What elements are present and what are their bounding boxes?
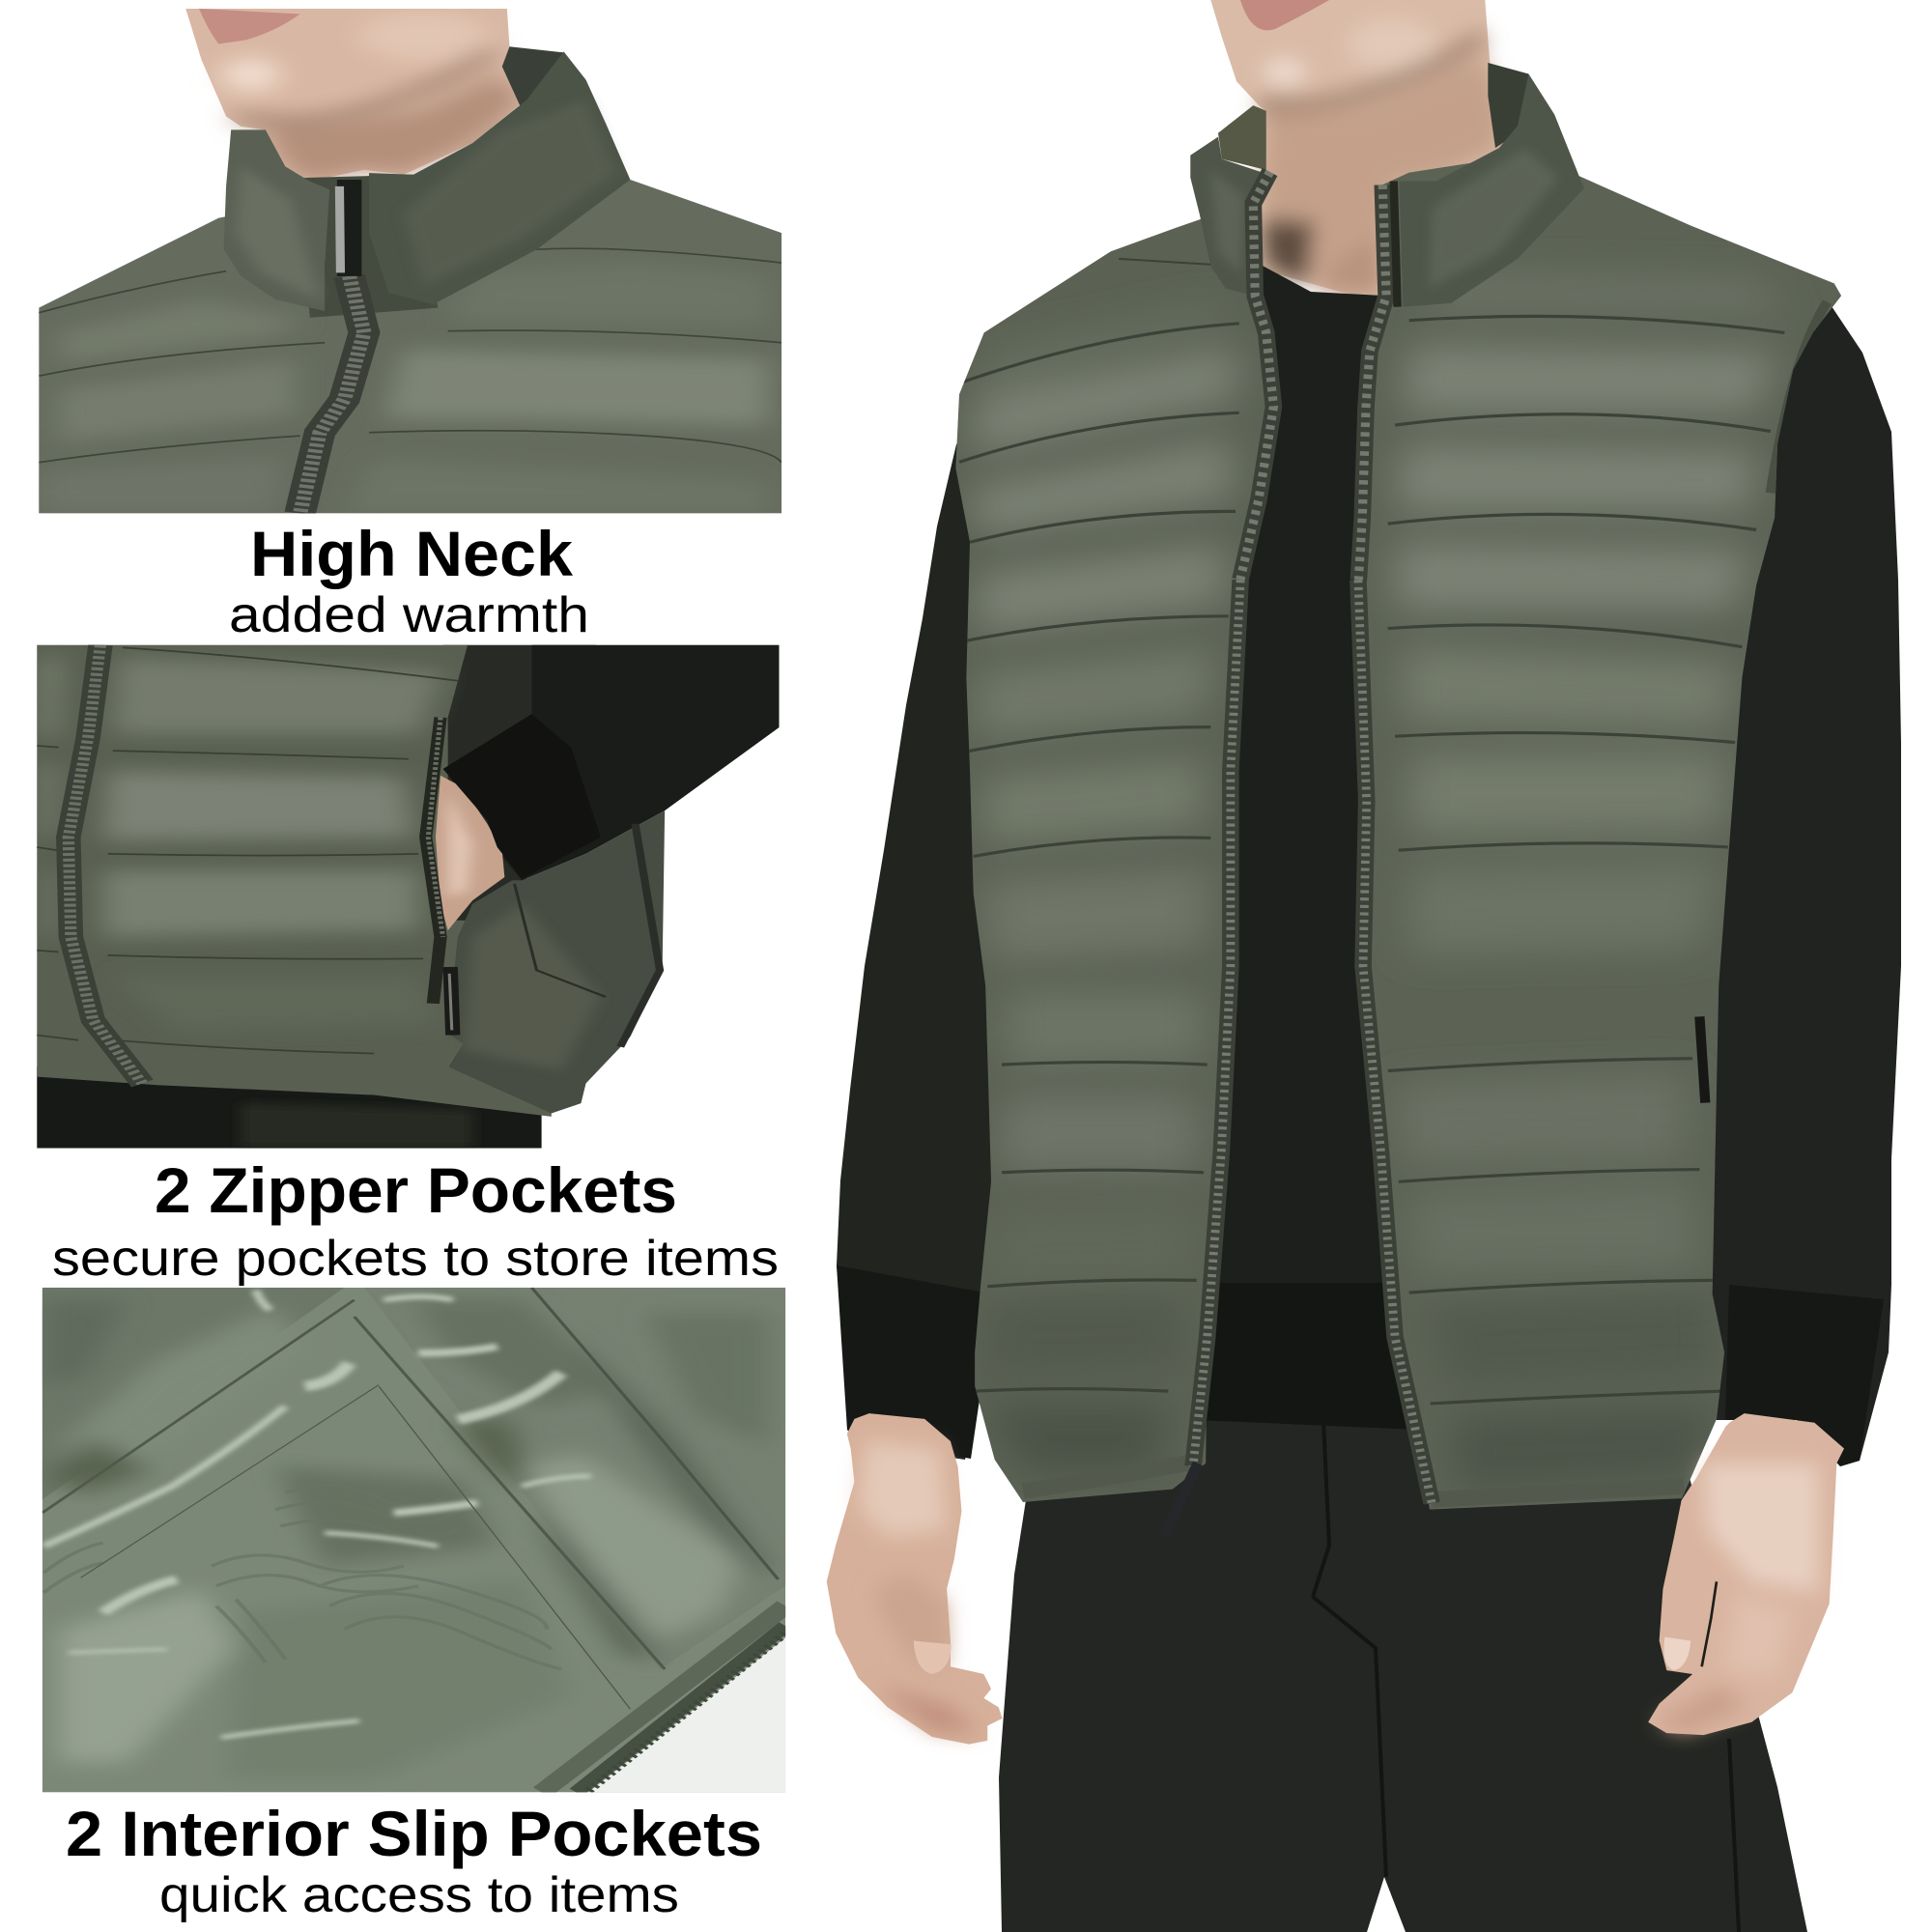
- heading: High Neck: added warmth: [229, 587, 589, 643]
- dark side panel: [442, 645, 596, 921]
- white background wedge: [588, 1637, 785, 1792]
- vest left front: [949, 166, 1282, 1510]
- face and neck: [1210, 0, 1518, 303]
- lips: [199, 9, 300, 43]
- quilting seams: [37, 647, 458, 1053]
- trousers: [37, 1066, 542, 1149]
- moire ripples: [43, 1486, 561, 1669]
- heading: High Neck: High Neck: [250, 518, 573, 589]
- lower side panel: [448, 810, 665, 1113]
- pocket zipper: [426, 718, 453, 1036]
- left sleeve: [837, 386, 1024, 1460]
- vest hem binding: [1023, 1462, 1684, 1499]
- sleeve cuffs: [837, 1265, 995, 1459]
- heading: 2 Zipper Pockets: [52, 1154, 779, 1287]
- quilted panel right: [364, 1288, 785, 1669]
- satin highlights: [43, 1290, 591, 1738]
- sweater rib hem: [1198, 1283, 1420, 1430]
- lips: [1240, 0, 1329, 30]
- heading: High Neck: [229, 518, 589, 643]
- front zipper: [69, 645, 142, 1083]
- lit vest front: [37, 645, 552, 1117]
- neck-side zippers: [1240, 172, 1398, 580]
- zipper placket: [298, 175, 438, 318]
- heading: 2 Interior Slip Pockets: 2 Interior Slip Pockets: [66, 1798, 762, 1869]
- zipper: [300, 180, 364, 513]
- zipper pull: [1164, 1463, 1198, 1536]
- vest right front: [1352, 148, 1848, 1516]
- face and neck skin: [185, 9, 522, 182]
- pocket seams: [43, 1288, 779, 1709]
- trousers: [999, 1391, 1807, 1932]
- heading: 2 Interior Slip Pockets: quick access to items: [159, 1867, 679, 1923]
- vest body: [39, 180, 781, 513]
- collar right: [369, 51, 630, 304]
- quilted outer lining top-left: [43, 1288, 345, 1499]
- collar left: [224, 129, 329, 311]
- main photo: model wearing the vest: [827, 0, 1901, 1932]
- heading: 2 Interior Slip Pockets: [66, 1798, 762, 1923]
- right hand: [1648, 1413, 1844, 1735]
- collar lining: [1488, 63, 1528, 148]
- stand collars: [1190, 63, 1584, 580]
- collar left lining: [1218, 105, 1266, 170]
- left hand: [827, 1413, 1003, 1745]
- panel: interior slip pockets detail photo: [43, 1288, 785, 1792]
- collar lining: [502, 46, 564, 110]
- heading: 2 Zipper Pockets: 2 Zipper Pockets: [155, 1154, 677, 1226]
- lower zippers: [1193, 580, 1705, 1503]
- ribbed cuff: [443, 714, 601, 879]
- quilting seams: [39, 248, 781, 463]
- wrist in pocket: [436, 776, 504, 930]
- panel: zipper pockets detail photo: [37, 645, 780, 1149]
- sleeve: [489, 645, 779, 880]
- collar right: [1400, 74, 1584, 307]
- panel: high neck detail photo: [39, 9, 781, 513]
- right sleeve: [1662, 283, 1901, 1466]
- interior zipper: [542, 1606, 785, 1792]
- sweater chest: [1198, 265, 1420, 1430]
- heading: 2 Zipper Pockets: secure pockets to store items: [52, 1231, 779, 1287]
- collar left: [1190, 137, 1266, 296]
